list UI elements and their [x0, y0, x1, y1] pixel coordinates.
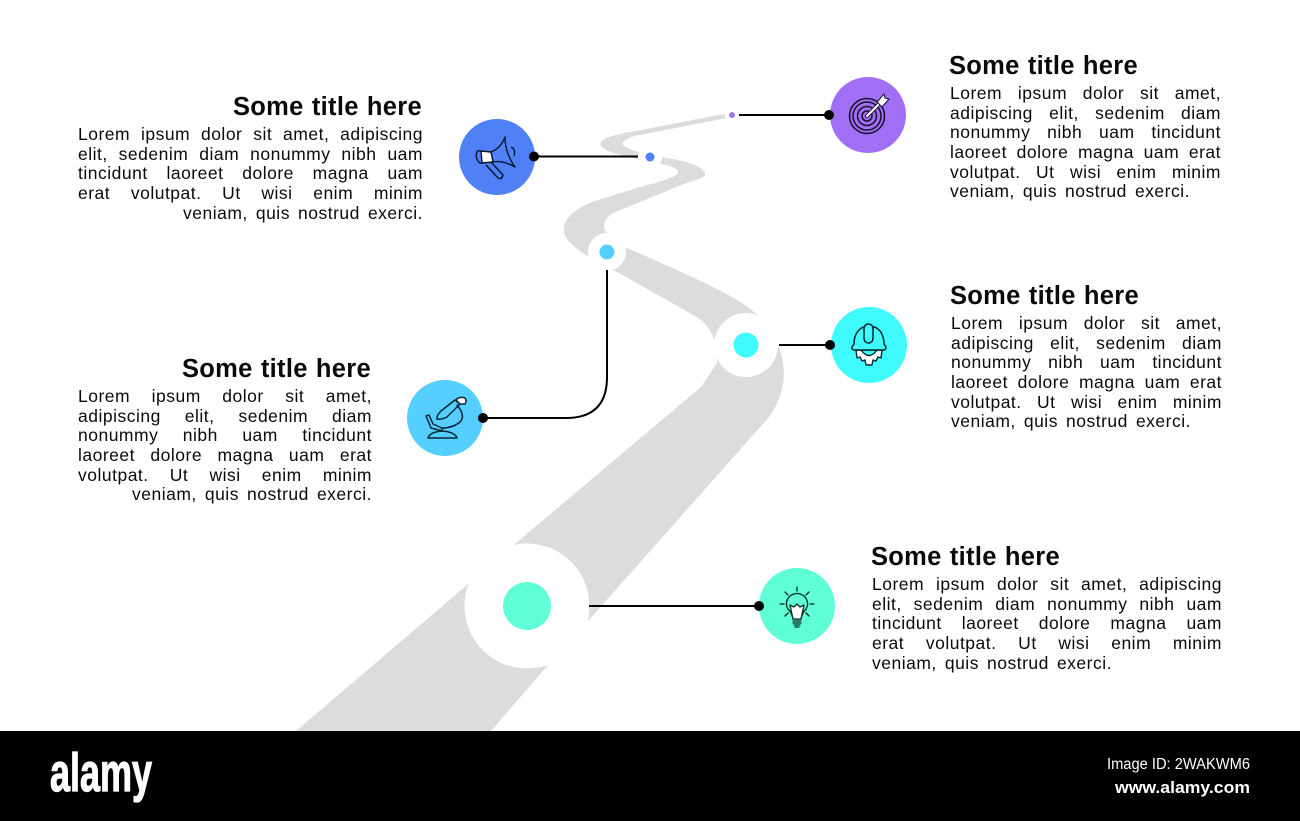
- body text: erat volutpat. Ut wisi enim minim: [872, 633, 1222, 653]
- connector: step 1: [739, 110, 834, 120]
- body text: tincidunt laoreet dolore magna uam: [872, 613, 1222, 633]
- body text: volutpat. Ut wisi enim minim: [951, 392, 1222, 412]
- body text: veniam, quis nostrud exerci.: [183, 203, 423, 223]
- heading: Some title here: [233, 93, 422, 121]
- step 3 road marker: [588, 233, 626, 271]
- body text: [872, 574, 1222, 673]
- body text: veniam, quis nostrud exerci.: [132, 484, 372, 504]
- step 5 road marker: [464, 544, 590, 668]
- image id: Image ID: 2WAKWM6: [1107, 756, 1250, 773]
- panel: top right text: [949, 52, 1221, 201]
- body text: erat volutpat. Ut wisi enim minim: [78, 183, 423, 203]
- body text: elit, sedenim diam nonummy nibh uam: [78, 144, 423, 164]
- panel: bottom right text: [871, 543, 1222, 673]
- body text: veniam, quis nostrud exerci.: [951, 411, 1191, 431]
- body text: veniam, quis nostrud exerci.: [950, 181, 1190, 201]
- panel: top left text: [78, 93, 423, 223]
- body text: elit, sedenim diam nonummy nibh uam: [872, 594, 1222, 614]
- icon badge: megaphone: [459, 119, 535, 195]
- heading: Some title here: [949, 52, 1138, 80]
- body text: Lorem ipsum dolor sit amet, adipiscing: [872, 574, 1222, 594]
- body text: volutpat. Ut wisi enim minim: [950, 162, 1221, 182]
- body text: Lorem ipsum dolor sit amet,: [951, 313, 1222, 333]
- heading: Some title here: [871, 543, 1060, 571]
- body text: [950, 83, 1221, 201]
- step 2 road marker: [638, 145, 662, 169]
- heading: Some title here: [950, 282, 1139, 310]
- body text: laoreet dolore magna uam erat: [951, 372, 1222, 392]
- step 4 road marker: [714, 313, 778, 377]
- winding road: [296, 113, 784, 731]
- body text: adipiscing elit, sedenim diam: [951, 333, 1222, 353]
- body text: tincidunt laoreet dolore magna uam: [78, 163, 423, 183]
- body text: Lorem ipsum dolor sit amet, adipiscing: [78, 124, 423, 144]
- body text: nonummy nibh uam tincidunt: [950, 122, 1221, 142]
- website: www.alamy.com: [1114, 778, 1250, 797]
- icon badge: microscope: [407, 380, 483, 456]
- body text: volutpat. Ut wisi enim minim: [78, 465, 372, 485]
- connector: step 5: [589, 601, 764, 611]
- body text: laoreet dolore magna uam erat: [950, 142, 1221, 162]
- heading: Some title here: [182, 355, 371, 383]
- connector: step 2: [529, 152, 638, 162]
- panel: middle left text: [78, 355, 372, 504]
- body text: adipiscing elit, sedenim diam: [950, 103, 1221, 123]
- footer bar: [0, 731, 1300, 821]
- body text: Lorem ipsum dolor sit amet,: [950, 83, 1221, 103]
- body text: [78, 386, 372, 504]
- body text: laoreet dolore magna uam erat: [78, 445, 372, 465]
- body text: Lorem ipsum dolor sit amet,: [78, 386, 372, 406]
- body text: [78, 124, 423, 223]
- icon badge: light bulb: [759, 568, 835, 644]
- step 1 road marker: [725, 108, 739, 122]
- logo wordmark: alamy: [50, 743, 152, 803]
- connector: step 4: [779, 340, 835, 350]
- body text: veniam, quis nostrud exerci.: [872, 653, 1112, 673]
- body text: nonummy nibh uam tincidunt: [78, 425, 372, 445]
- body text: adipiscing elit, sedenim diam: [78, 406, 372, 426]
- body text: [951, 313, 1222, 431]
- body text: nonummy nibh uam tincidunt: [951, 352, 1222, 372]
- connector: step 3: [478, 270, 607, 423]
- icon badge: target: [830, 77, 906, 153]
- panel: middle right text: [950, 282, 1222, 431]
- icon badge: helmet and gear: [831, 307, 907, 383]
